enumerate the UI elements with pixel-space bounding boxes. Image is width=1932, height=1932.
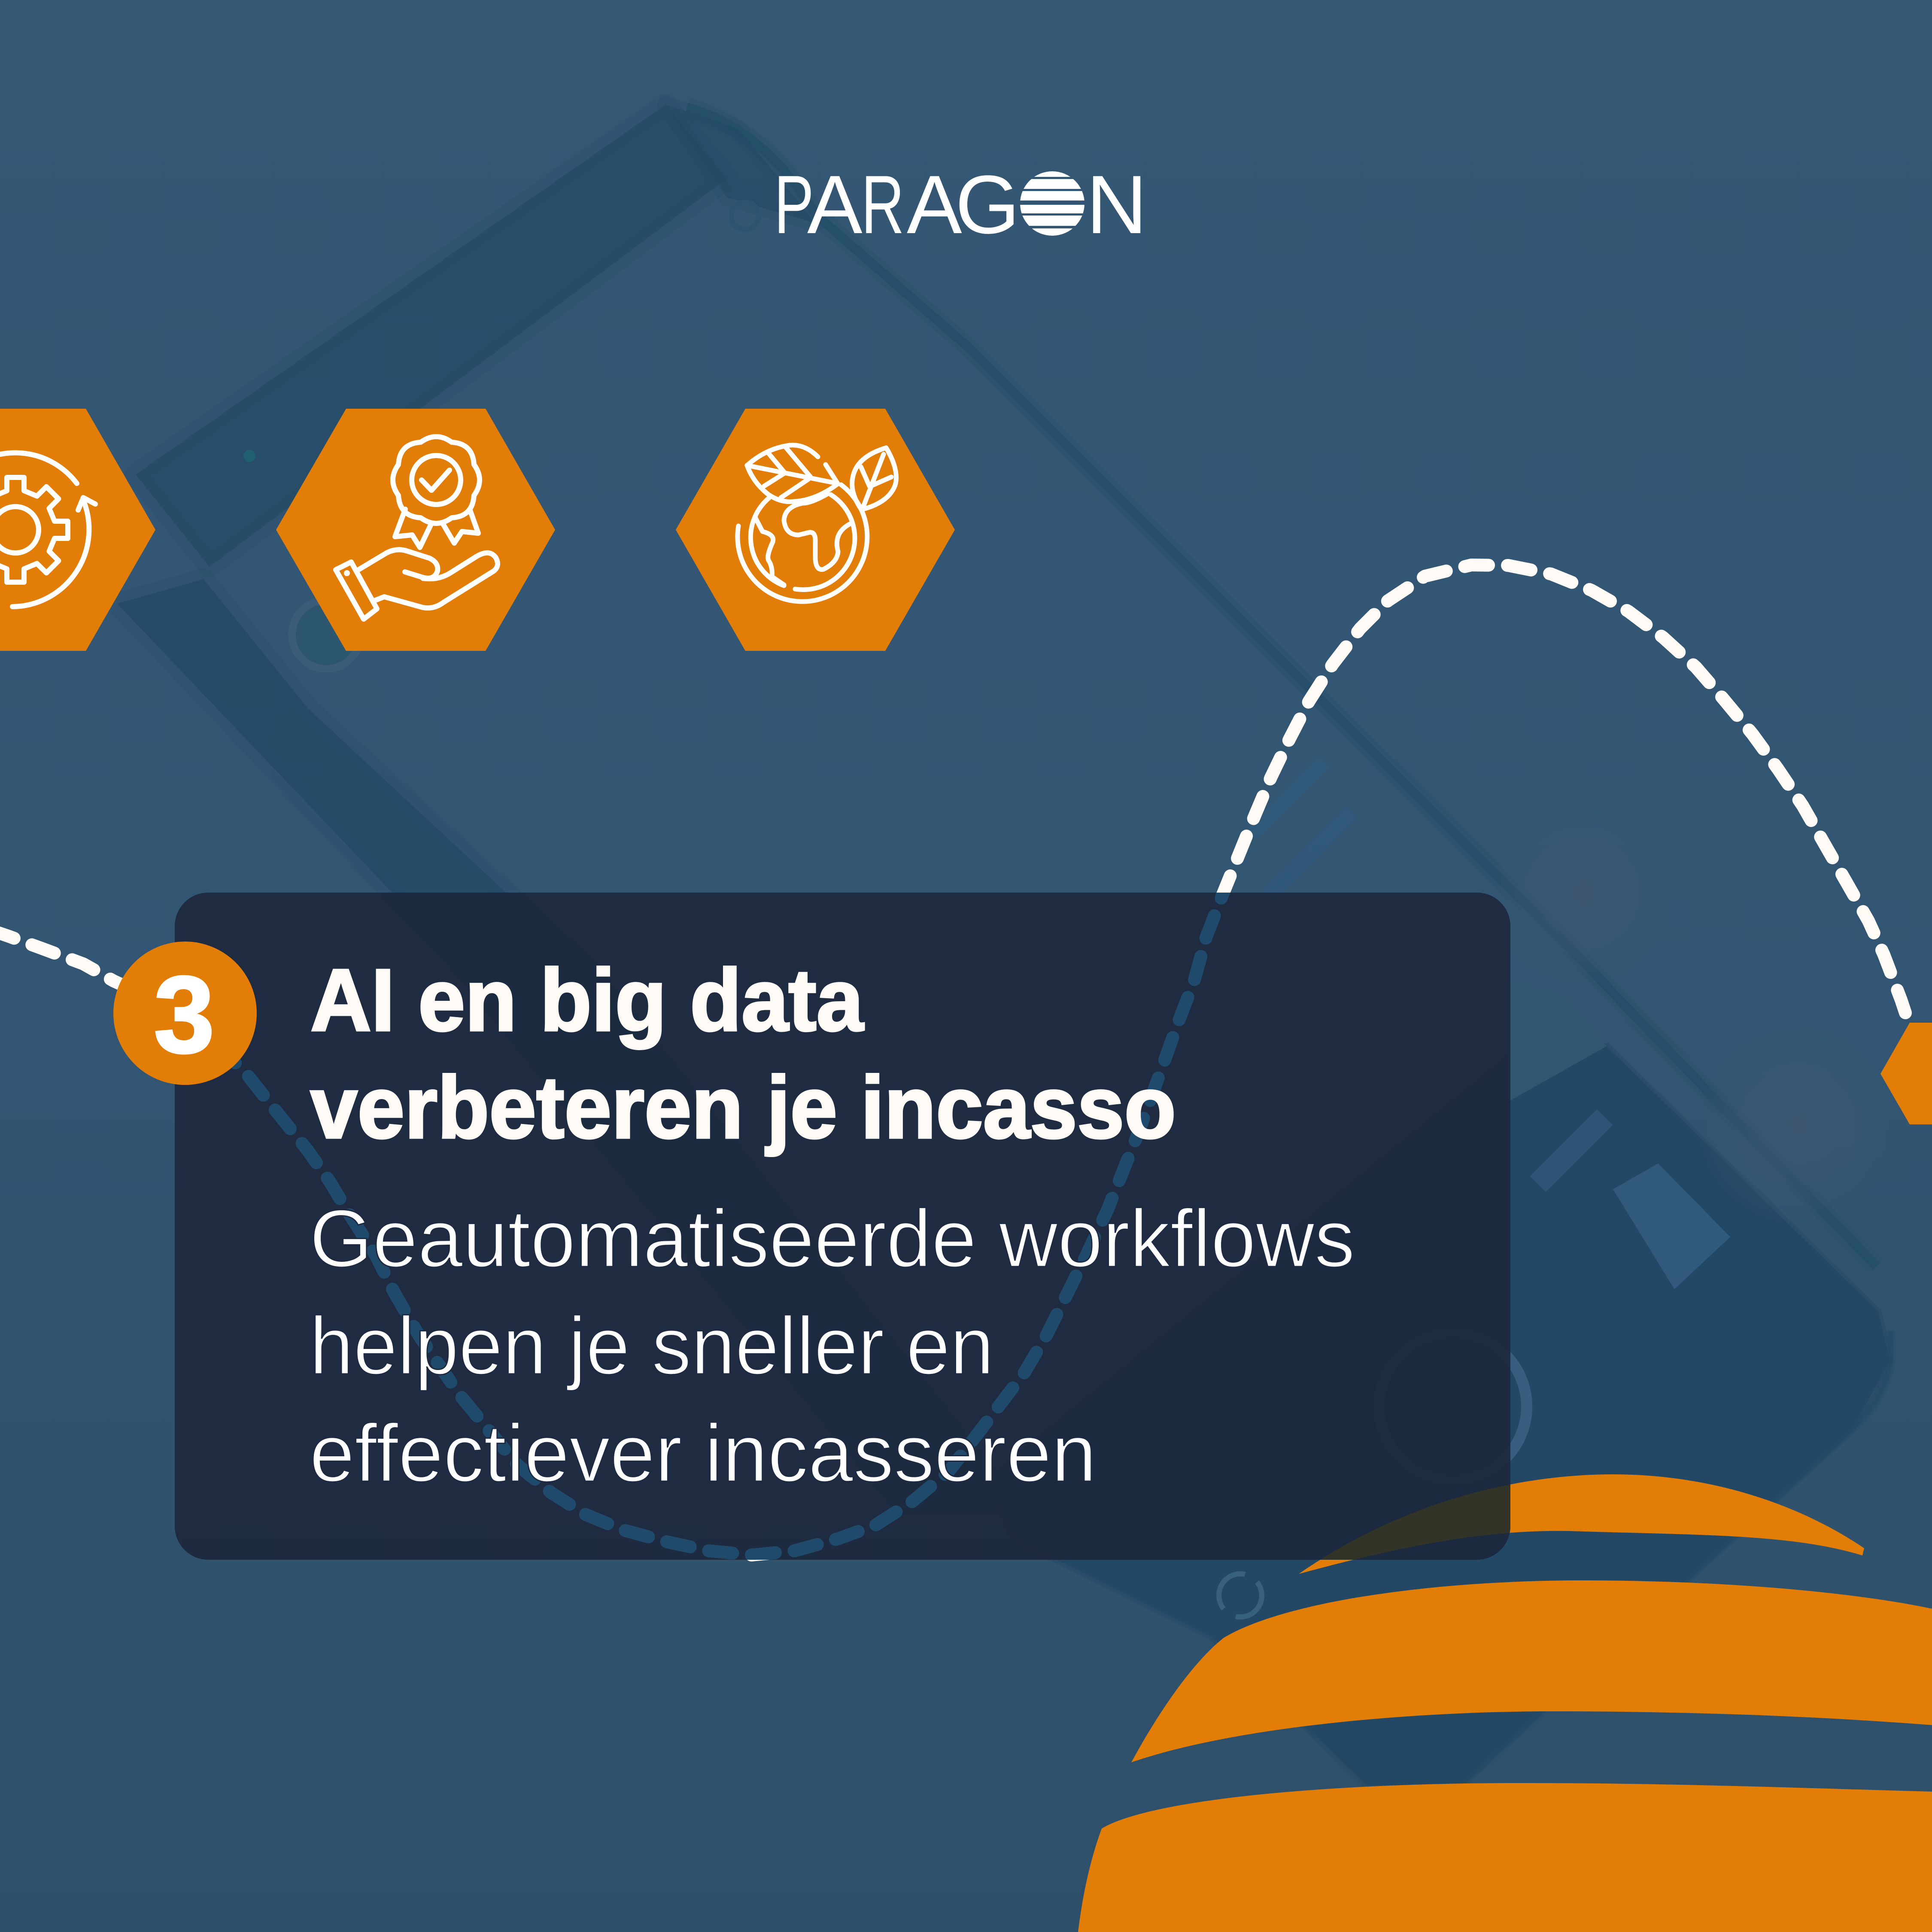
logo globe xyxy=(1018,171,1086,236)
body text xyxy=(310,1193,1355,1499)
logo: PARAGON: G xyxy=(955,158,1020,251)
logo: PARAGON: P xyxy=(774,158,814,251)
logo: PARAGON: N xyxy=(1086,159,1147,251)
dashed route line inside the card xyxy=(231,893,1230,1560)
heading: AI en big data xyxy=(310,951,864,1049)
body text: effectiever incasseren xyxy=(310,1408,1097,1499)
panel: text card xyxy=(175,893,1510,1560)
heading: verbeteren je incasso xyxy=(310,1058,1176,1157)
logo: PARAGON: R xyxy=(861,158,904,251)
logo: PARAGON xyxy=(779,171,1140,236)
heading xyxy=(310,951,1176,1157)
logo: PARAGON: A xyxy=(807,158,863,251)
body text: Geautomatiseerde workflows xyxy=(310,1193,1355,1284)
hexagon: next step at right edge xyxy=(1880,1023,1932,1124)
hexagon icon: award rosette in hand xyxy=(276,409,555,651)
logo: PARAGON: A xyxy=(907,158,962,251)
swoosh tip seen through the card xyxy=(1320,1485,1510,1560)
hexagon icon: gear with cycle arrows xyxy=(0,409,155,651)
dashed route line xyxy=(0,565,1906,1555)
step number badge xyxy=(113,942,257,1085)
orange swooshes xyxy=(1078,1474,1932,1932)
hexagon icon: globe with leaves xyxy=(676,409,955,651)
body text: helpen je sneller en xyxy=(310,1300,994,1391)
step number badge: 3 xyxy=(154,954,215,1075)
